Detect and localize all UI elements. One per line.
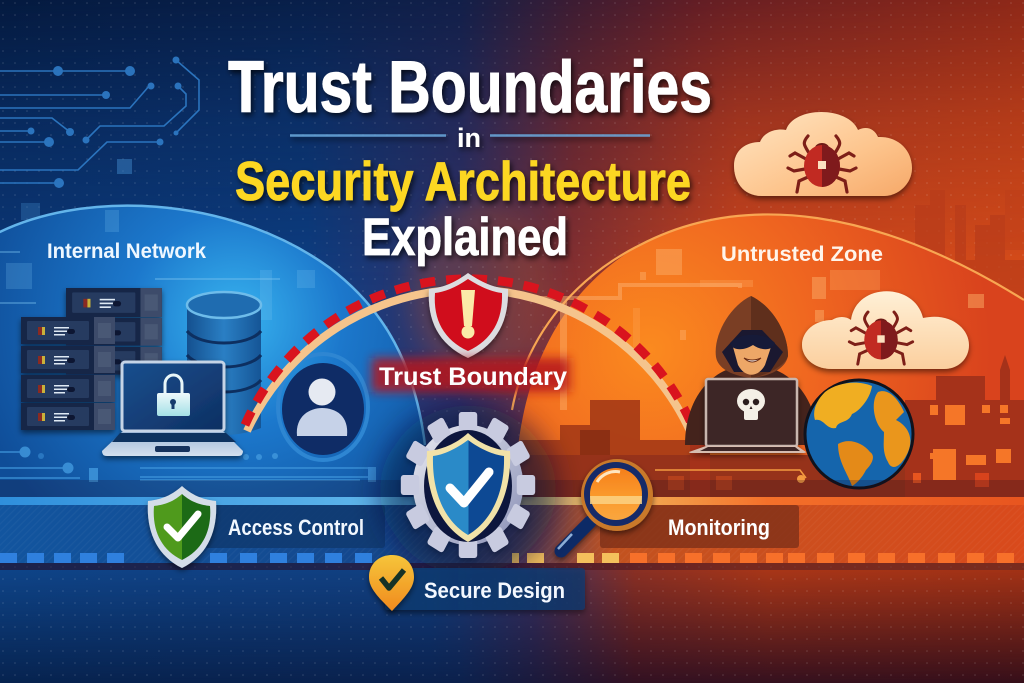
access control pill: Access Control bbox=[228, 515, 364, 540]
access control pill bbox=[205, 505, 385, 548]
icon: laptop with lock bbox=[102, 362, 243, 456]
icon: cloud with bug top bbox=[734, 112, 912, 196]
icon: cloud with bug lower bbox=[802, 291, 969, 369]
icon: globe bbox=[805, 380, 913, 488]
center dark region with cityscape bbox=[515, 355, 1024, 497]
circuit traces bbox=[0, 56, 199, 220]
circuit lines lower left bbox=[0, 446, 376, 482]
title connector lines bbox=[290, 134, 650, 137]
title: Security Architecture bbox=[235, 150, 691, 212]
lower footer background bbox=[0, 570, 1024, 683]
icon: green check shield bbox=[148, 486, 216, 568]
center band bbox=[0, 480, 1024, 563]
right city skyline top bbox=[880, 190, 1024, 300]
label: untrusted zone: Untrusted Zone bbox=[721, 242, 883, 266]
title: in bbox=[457, 123, 481, 153]
dashed squares strip bbox=[0, 553, 1024, 570]
secure design pill bbox=[385, 568, 585, 610]
monitoring pill: Monitoring bbox=[668, 515, 770, 540]
trust boundary dashed arc bbox=[245, 279, 692, 431]
icon: server stacks bbox=[21, 288, 162, 430]
icon: warning shield bbox=[429, 273, 508, 358]
trust boundary label: Trust Boundary bbox=[379, 363, 567, 391]
title bbox=[228, 47, 712, 267]
title: Explained bbox=[362, 208, 568, 267]
icon: gear with shield bbox=[380, 405, 556, 575]
secure design pill: Secure Design bbox=[424, 578, 565, 603]
icon: database bbox=[187, 292, 261, 435]
icon: magnifier bbox=[558, 459, 653, 551]
internal network zone bbox=[0, 206, 425, 497]
monitoring pill bbox=[600, 505, 799, 548]
hacker laptop bbox=[689, 379, 806, 453]
untrusted zone bbox=[512, 214, 1024, 500]
title: Trust Boundaries bbox=[228, 47, 712, 128]
label: internal network: Internal Network bbox=[47, 239, 206, 263]
icon: hacker with laptop bbox=[685, 296, 818, 453]
icon: user bbox=[278, 354, 368, 460]
icon: orange check pin bbox=[369, 555, 414, 611]
